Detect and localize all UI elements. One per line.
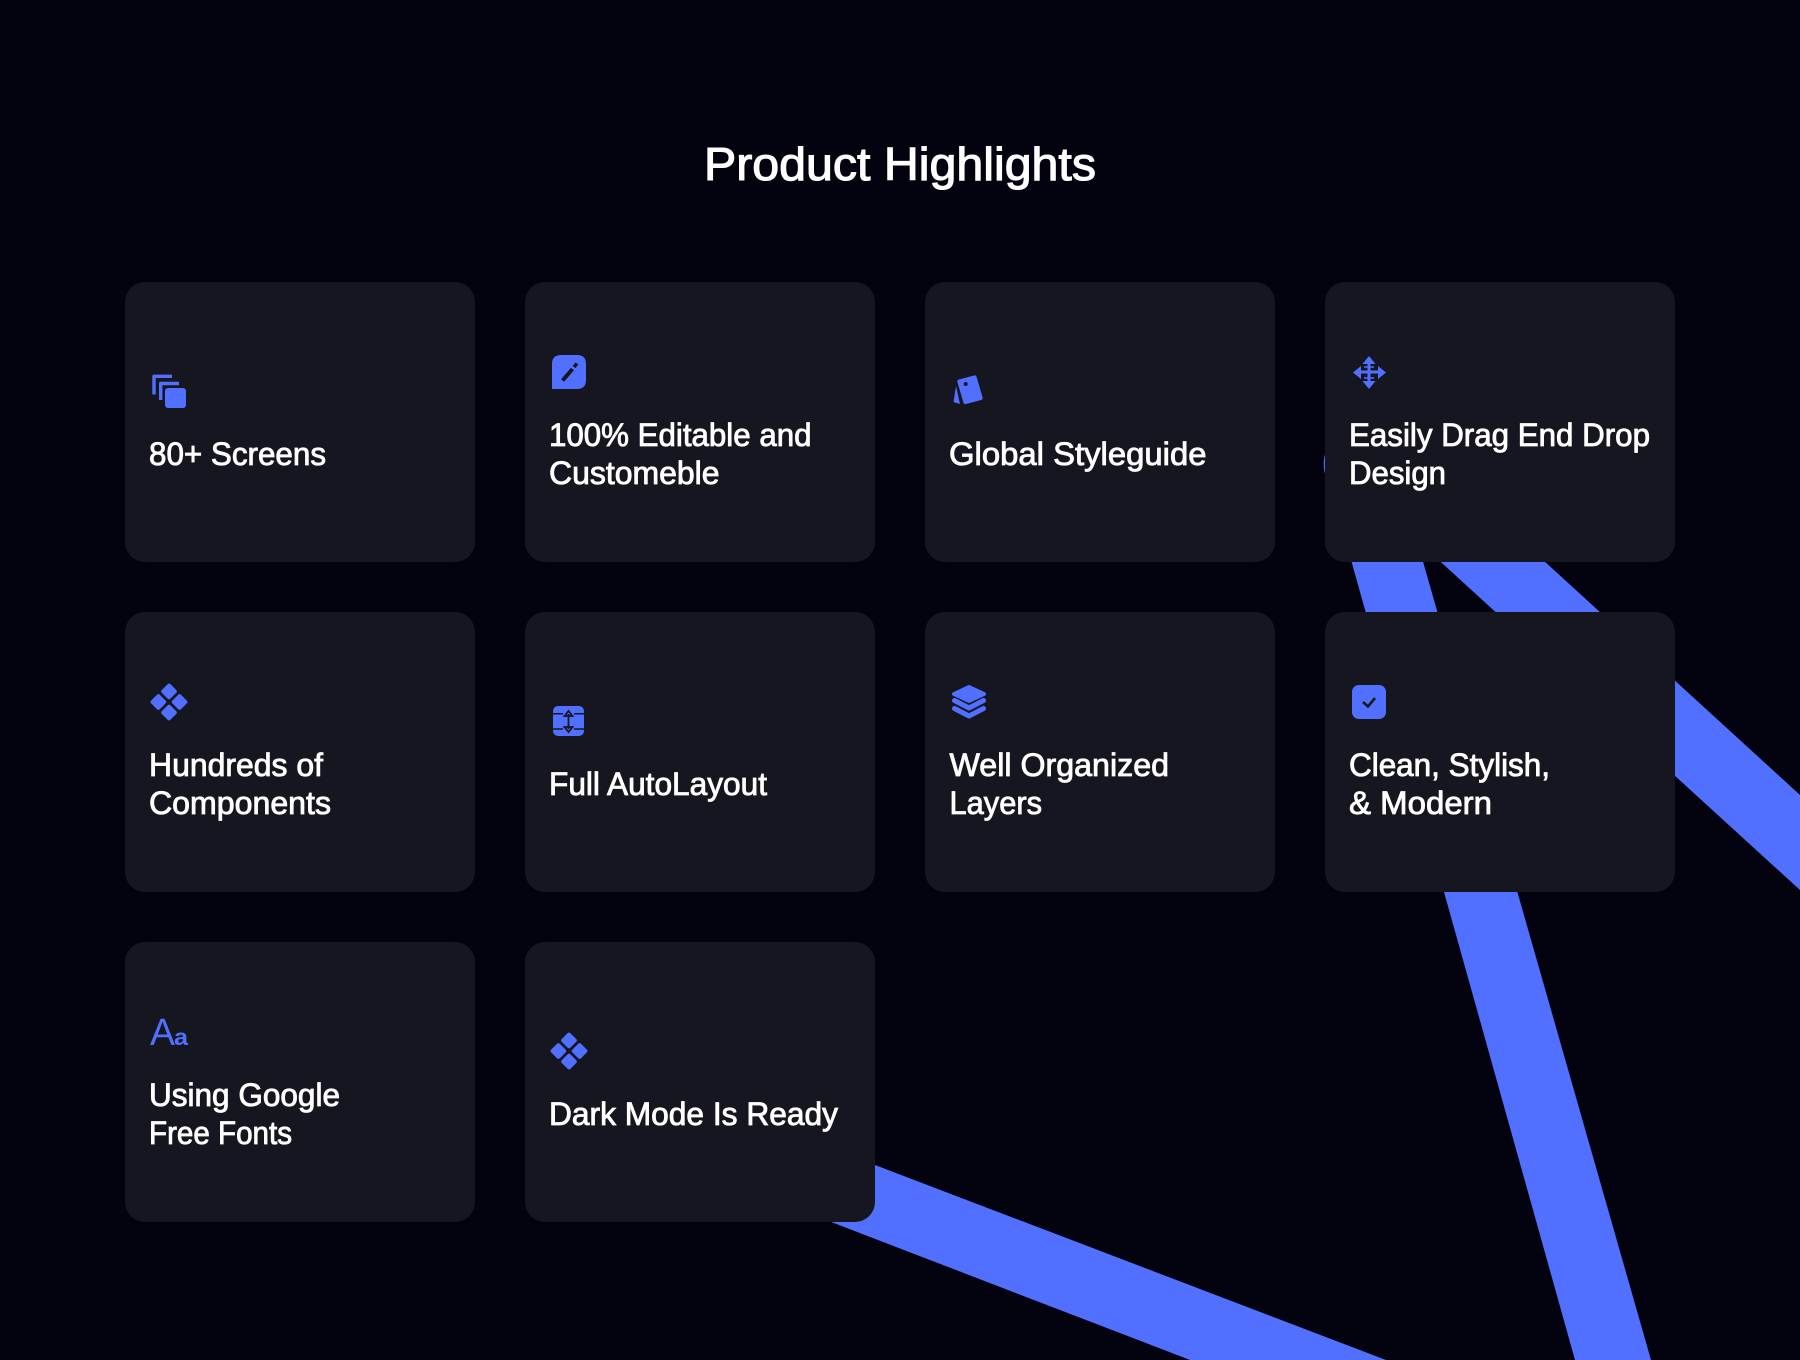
label: Layers — [950, 785, 1042, 821]
card: 80+ Screens — [125, 282, 475, 562]
label: Design — [1349, 455, 1446, 491]
icon: component diamonds — [150, 683, 188, 721]
label: Free Fonts — [149, 1115, 292, 1151]
card: Easily Drag End Drop Design — [1325, 282, 1675, 562]
label: & Modern — [1349, 785, 1492, 821]
icon: dark mode diamonds — [550, 1032, 588, 1070]
label: Hundreds of — [149, 747, 323, 783]
label: 80+ Screens — [149, 436, 326, 472]
card: Using Google Free Fonts — [125, 942, 475, 1222]
icon: stacked screens — [154, 376, 186, 408]
label: Using Google — [149, 1077, 340, 1113]
icon: edit pencil — [552, 355, 586, 389]
icon: auto layout — [553, 706, 584, 736]
label: Global Styleguide — [949, 436, 1206, 472]
card: Well Organized Layers — [925, 612, 1275, 892]
card: Hundreds of Components — [125, 612, 475, 892]
label: Components — [149, 785, 331, 821]
icon: layers — [954, 687, 984, 716]
label: Full AutoLayout — [549, 766, 767, 802]
label: Customeble — [549, 455, 720, 491]
label: Well Organized — [950, 747, 1169, 783]
card: Dark Mode Is Ready — [525, 942, 875, 1222]
label: Clean, Stylish, — [1349, 747, 1550, 783]
icon: move arrows — [1353, 356, 1386, 389]
icon: font Aa: A — [150, 1012, 176, 1054]
card: Full AutoLayout — [525, 612, 875, 892]
label: Dark Mode Is Ready — [549, 1096, 838, 1132]
card: Clean, Stylish, & Modern — [1325, 612, 1675, 892]
title: Product Highlights — [704, 138, 1096, 190]
icon: swatch tags — [954, 375, 983, 404]
card: Global Styleguide — [925, 282, 1275, 562]
icon: check box — [1352, 685, 1386, 719]
background blue stripes — [800, 400, 1800, 1360]
label: Easily Drag End Drop — [1349, 417, 1650, 453]
icon: font Aa: a — [174, 1024, 188, 1050]
label: 100% Editable and — [549, 417, 812, 453]
card: 100% Editable and Customeble — [525, 282, 875, 562]
